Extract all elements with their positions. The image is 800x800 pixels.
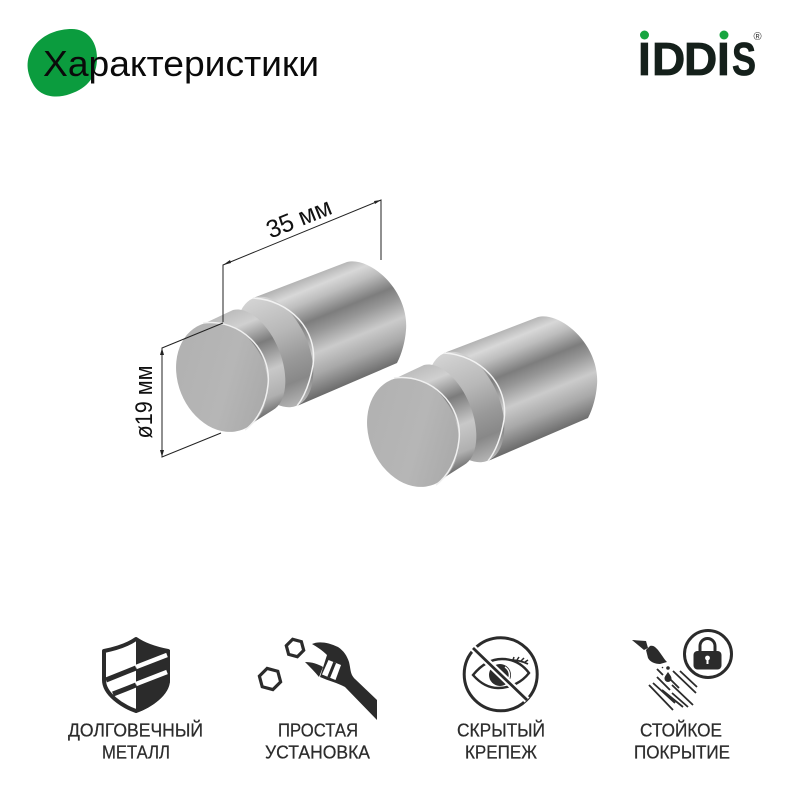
label: [457, 720, 545, 762]
label: ПОКРЫТИЕ: [634, 742, 730, 762]
logo: IDDIS: I: [717, 33, 730, 85]
icon: nuts and wrench: [257, 638, 377, 720]
icon: crossed-out eye: [464, 638, 537, 711]
feature: durable metal: [68, 637, 203, 762]
label: ДОЛГОВЕЧНЫЙ: [68, 720, 203, 740]
logo: IDDIS: I: [638, 33, 651, 85]
feature: hidden fastening: [457, 638, 545, 762]
logo: IDDIS: D: [652, 33, 685, 85]
product illustration: left knob: [160, 261, 406, 446]
dimension: length 35 mm: [223, 193, 381, 322]
title text: Характеристики: [43, 43, 319, 84]
icon: green blob: [28, 29, 97, 97]
label: СКРЫТЫЙ: [457, 720, 545, 740]
label: ПРОСТАЯ: [278, 720, 358, 740]
label: КРЕПЕЖ: [465, 742, 537, 762]
heading: Характеристики: [28, 29, 319, 97]
dimension: diameter 19 mm: [131, 323, 223, 457]
label: СТОЙКОЕ: [640, 720, 722, 740]
icon: shield: [104, 637, 170, 713]
logo: IDDIS: D: [684, 33, 717, 85]
dimension: diameter 19 mm: ø19 мм: [131, 366, 158, 438]
label: МЕТАЛЛ: [102, 742, 170, 762]
dimension: length 35 mm: 35 мм: [262, 193, 336, 244]
logo: IDDIS: S: [732, 33, 756, 85]
logo: IDDIS: ®: [754, 31, 762, 43]
product illustration: right knob: [351, 316, 597, 501]
logo: IDDIS: [638, 30, 762, 85]
feature: easy installation: [257, 638, 377, 762]
label: [265, 720, 371, 762]
feature: resistant coating: [632, 630, 732, 762]
label: [68, 720, 203, 762]
icon: brush, paint strokes and padlock: [632, 630, 732, 710]
label: УСТАНОВКА: [265, 742, 371, 762]
label: [634, 720, 730, 762]
